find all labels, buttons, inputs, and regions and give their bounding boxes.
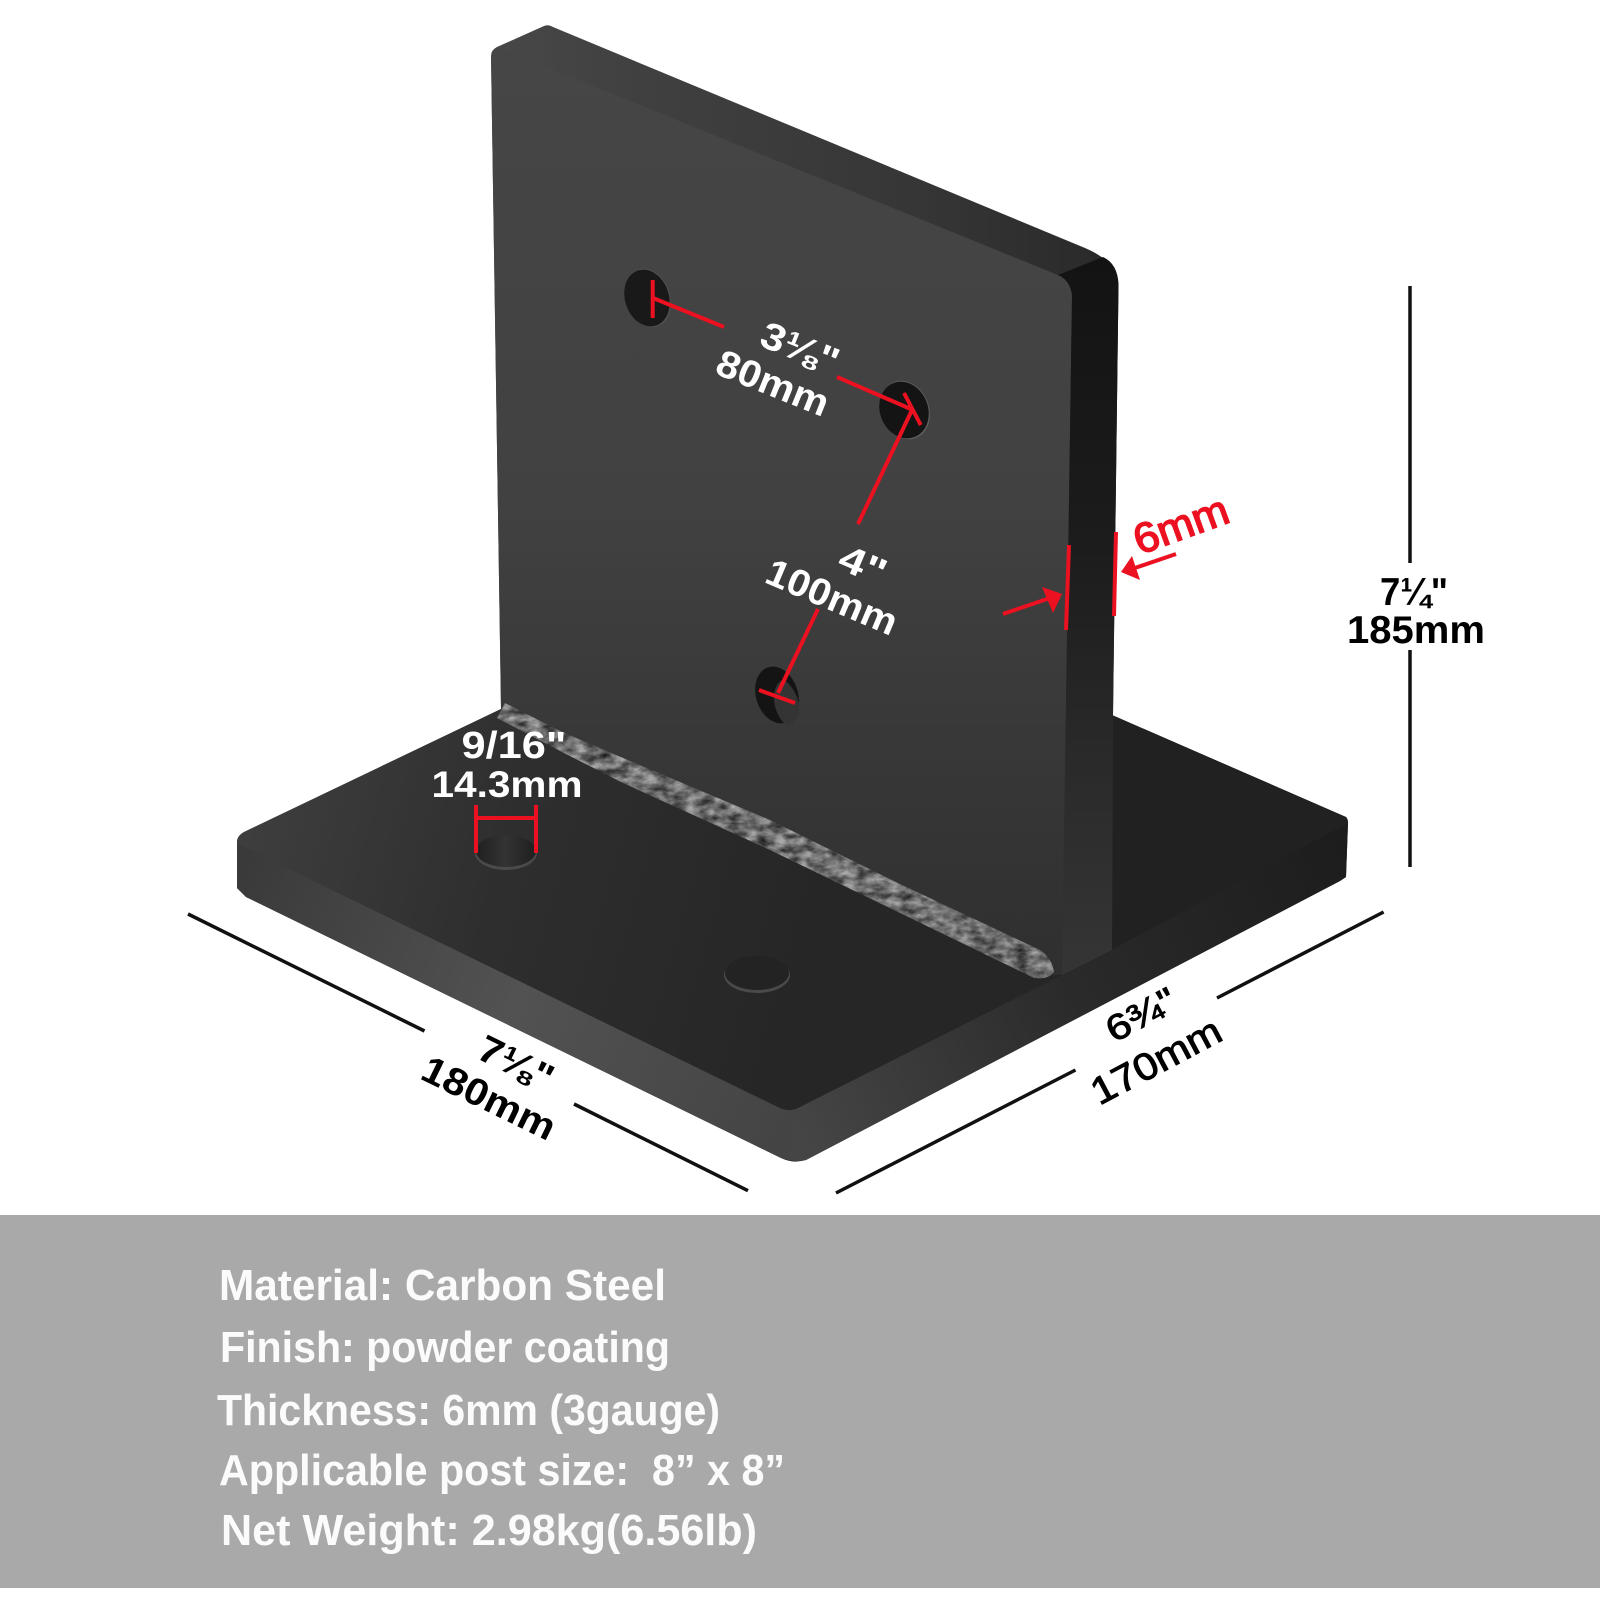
spec: finish: Finish: powder coating [220, 1323, 670, 1372]
base plate [237, 709, 1348, 1162]
label: 100mm hole spacing: 100mm [759, 551, 904, 644]
thickness arrow left [1003, 587, 1062, 614]
label: hole diameter [432, 725, 582, 805]
vertical hole spacing mark upper [858, 410, 912, 524]
spec: material: Material: Carbon Steel [219, 1261, 666, 1310]
base mounting hole front [724, 956, 790, 993]
vertical hole spacing mark lower [759, 609, 818, 703]
label: 80mm hole spacing: 80mm [710, 342, 835, 425]
plate hole lower [755, 666, 799, 724]
label: 6mm thickness: 6mm [1127, 486, 1235, 563]
depth label: 170mm [1084, 1010, 1229, 1114]
base hole diameter mark [476, 805, 536, 853]
height dimension line [1408, 286, 1412, 867]
depth dimension line front right [836, 912, 1384, 1193]
vertical plate [491, 25, 1118, 975]
label: 80mm hole spacing: 3⅛" [754, 314, 845, 384]
width label: 180mm [415, 1048, 562, 1149]
bracket product illustration [237, 25, 1348, 1162]
horizontal hole spacing mark right [837, 377, 921, 425]
thickness arrow right [1121, 554, 1176, 580]
plate hole upper left [617, 263, 678, 333]
width label: 7⅛" [471, 1028, 560, 1100]
label: 80mm hole spacing [710, 314, 845, 425]
panel: specifications [0, 1215, 1600, 1588]
spec: applicable post size: Applicable post size: 8” x 8” [219, 1446, 785, 1495]
height label: 185mm [1347, 609, 1485, 652]
depth label: 6¾" [1098, 979, 1183, 1050]
width dimension line front left [188, 914, 748, 1191]
label: 100mm hole spacing: 4" [832, 537, 893, 595]
height label [1347, 571, 1485, 652]
plate hole upper right [871, 373, 938, 447]
height label: 7¼" [1380, 571, 1448, 614]
horizontal hole spacing mark left [653, 280, 724, 327]
thickness tick left [1066, 545, 1069, 630]
weld seam [497, 703, 1054, 978]
label: hole diameter: 9/16" [462, 725, 566, 767]
base mounting hole with diameter mark [475, 835, 537, 870]
thickness tick right [1114, 532, 1116, 616]
depth label [1084, 979, 1229, 1114]
red dimension marks on plate [476, 280, 1116, 853]
spec: thickness: Thickness: 6mm (3gauge) [217, 1386, 720, 1435]
spec: net weight: Net Weight: 2.98kg(6.56lb) [221, 1506, 757, 1555]
label: hole diameter: 14.3mm [432, 764, 582, 805]
